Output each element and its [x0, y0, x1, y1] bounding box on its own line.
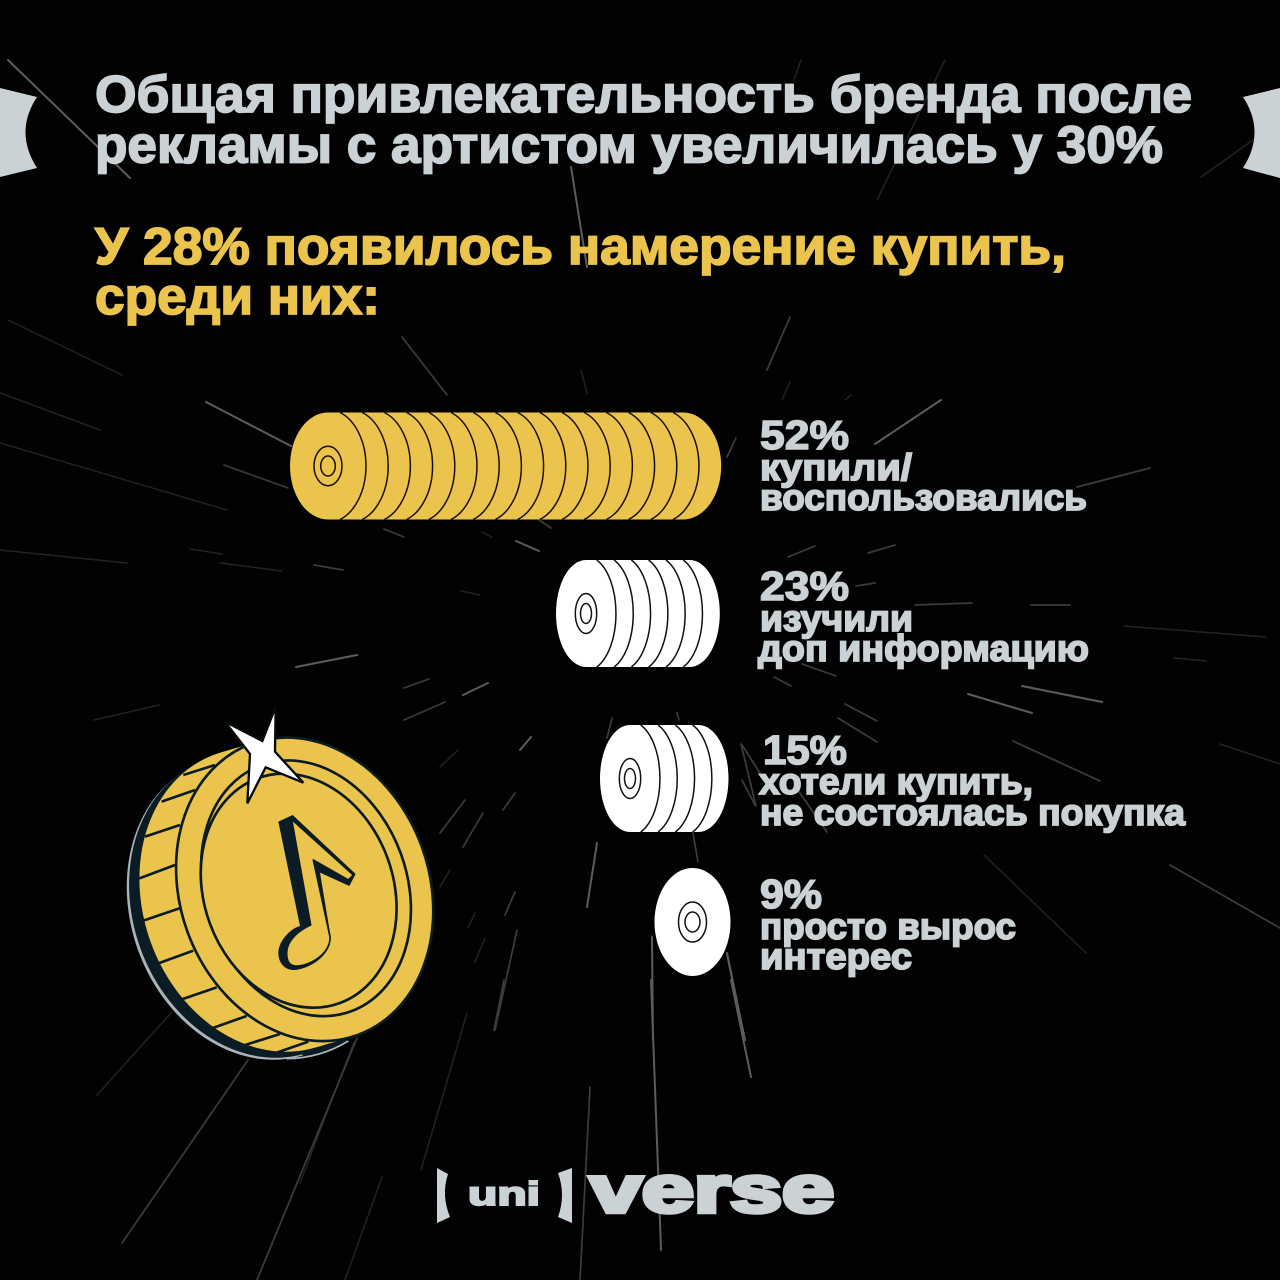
label: 52%: купили/	[760, 447, 912, 488]
label: 9%: просто вырос	[760, 906, 1016, 947]
icon: gold coin with music note	[85, 701, 475, 1096]
title: Общая привлекательность бренда после	[95, 66, 1192, 124]
label: 9%	[760, 871, 1016, 977]
label: 23%: изучили	[760, 598, 913, 639]
logo: verse: verse	[590, 1152, 834, 1226]
icon: music note	[278, 815, 356, 970]
icon: white star	[225, 707, 303, 803]
logo: uni verse	[437, 1152, 834, 1226]
coin stack: 9%	[654, 868, 730, 976]
label: 52%: воспользовались	[760, 477, 1087, 518]
label: 9%: 9%	[760, 871, 822, 917]
title: рекламы с артистом увеличилась у 30%	[95, 116, 1163, 174]
shape: right side tab	[1243, 88, 1280, 178]
label: 15%	[759, 727, 1185, 833]
label: 23%	[758, 563, 1089, 669]
shape: left side tab	[0, 88, 37, 177]
label: 15%: не состоялась покупка	[760, 792, 1185, 833]
logo: left bracket	[437, 1168, 450, 1223]
logo: right bracket	[558, 1168, 572, 1223]
coin stack: 52%	[290, 412, 721, 520]
subtitle: У 28% появилось намерение купить,	[95, 218, 1066, 276]
label: 15%: 15%	[763, 727, 847, 773]
label: 23%: доп информацию	[758, 628, 1089, 669]
label: 15%: хотели купить,	[759, 761, 1033, 802]
logo: uni: uni	[468, 1175, 540, 1212]
coin stack: 23%	[556, 560, 720, 667]
coin stack: 15%	[600, 725, 728, 832]
label: 23%: 23%	[760, 563, 849, 609]
label: 9%: интерес	[760, 936, 912, 977]
subtitle: среди них:	[95, 268, 380, 326]
label: 52%	[760, 412, 1087, 518]
subtitle	[95, 218, 1066, 326]
title	[95, 66, 1192, 174]
label: 52%: 52%	[760, 412, 849, 458]
